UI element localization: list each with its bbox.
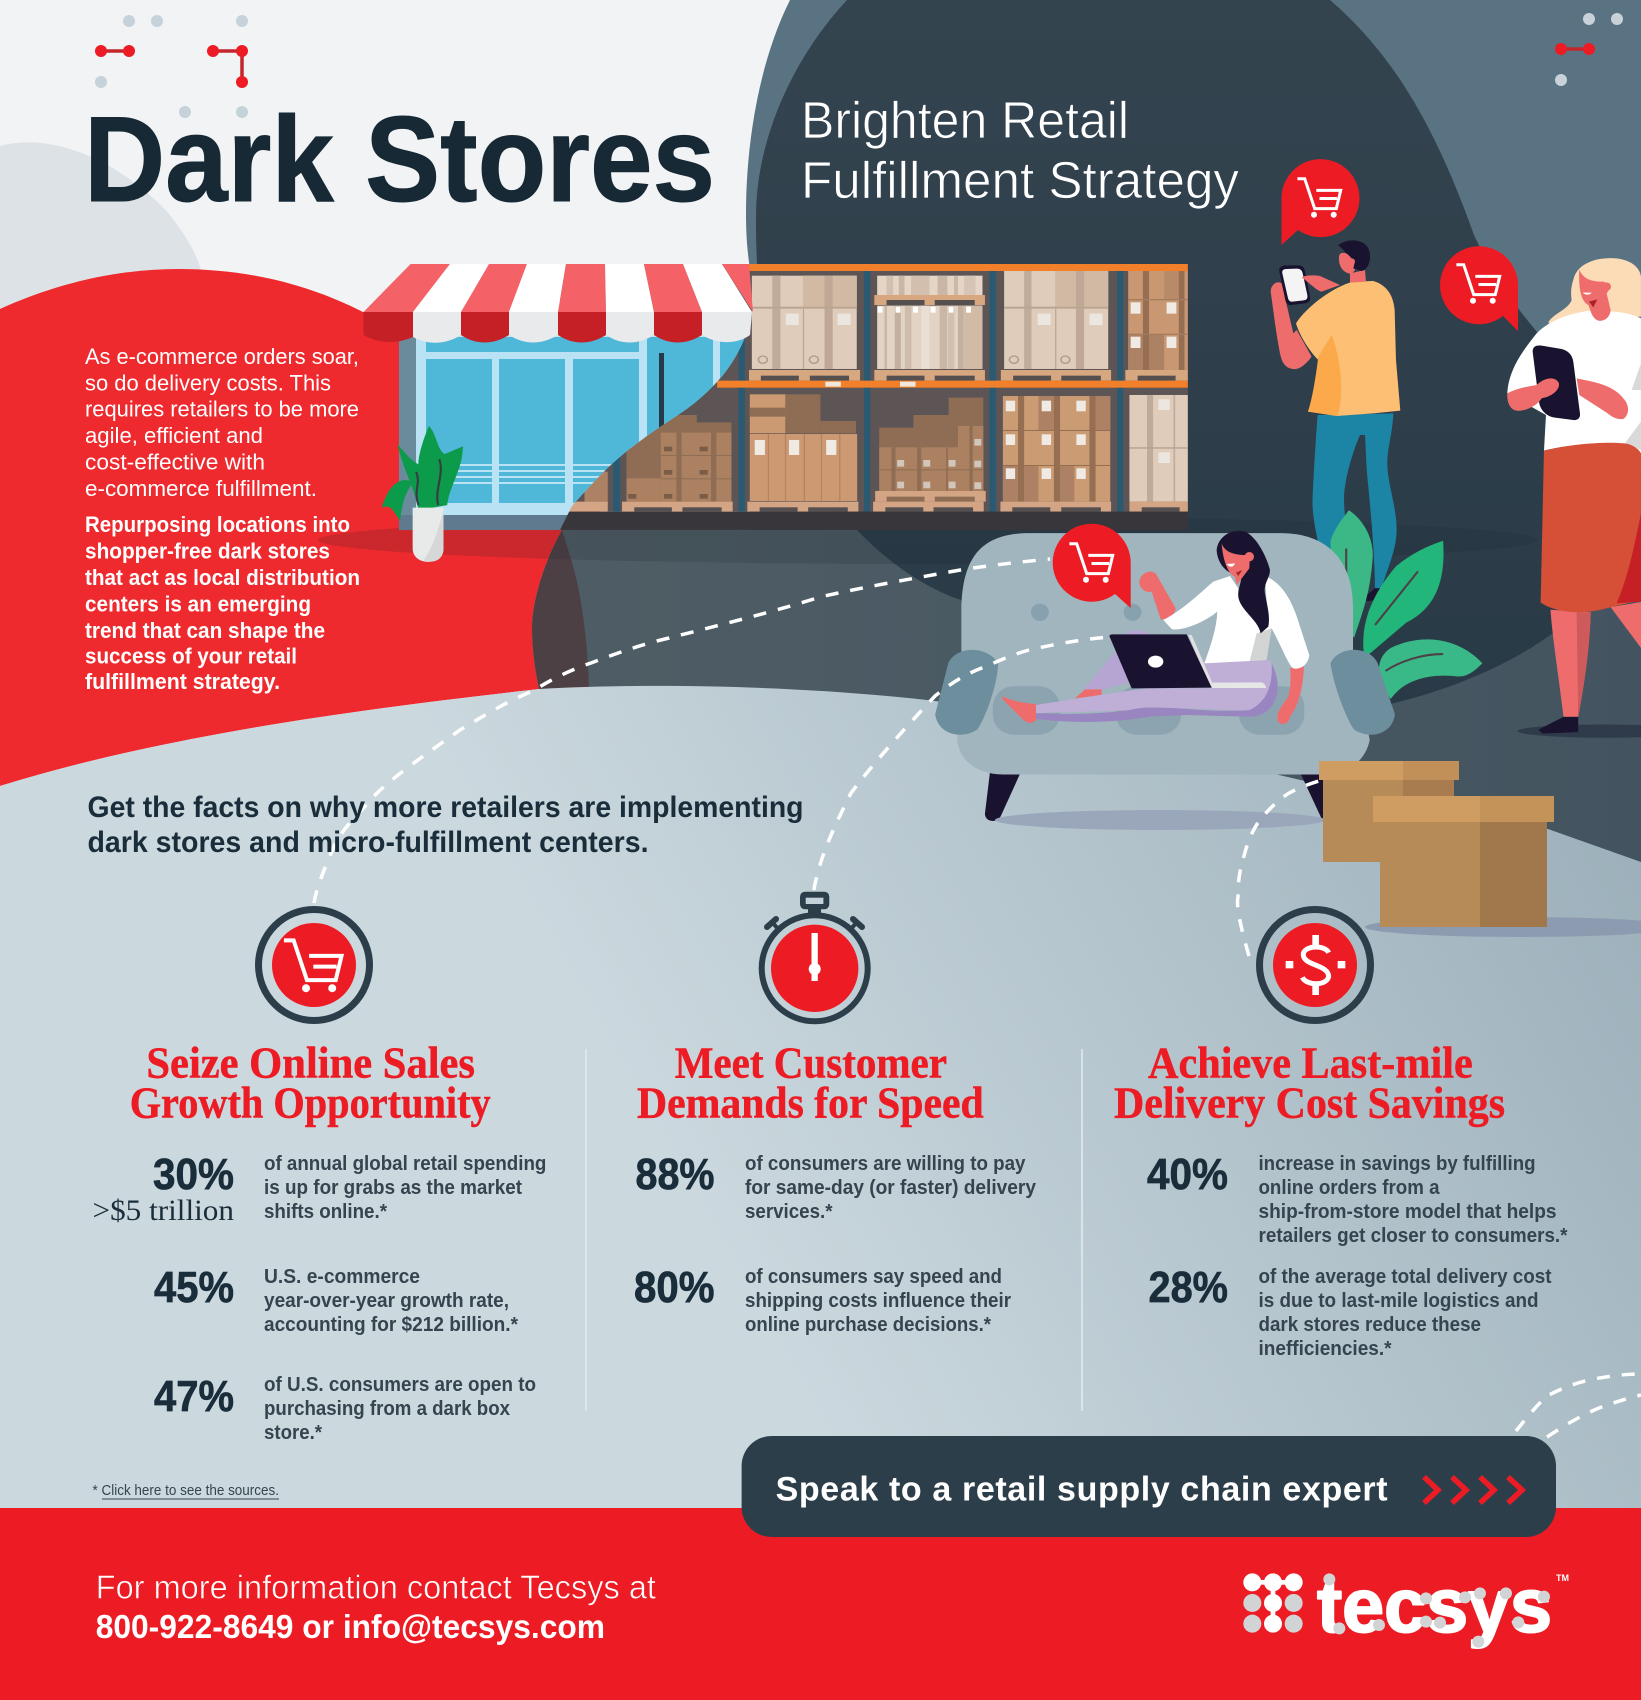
column 3 heading: Delivery Cost Savings bbox=[1114, 1078, 1505, 1128]
call to action button: Speak to a retail supply chain expert bbox=[776, 1471, 1388, 1509]
dashed routes bbox=[314, 559, 1641, 1437]
decorative dots top right bbox=[1555, 13, 1623, 86]
footer band bbox=[0, 1508, 1641, 1700]
column 2 heading bbox=[637, 1038, 984, 1128]
background: red blob bbox=[0, 269, 600, 786]
lower bay C bbox=[1000, 396, 1111, 512]
upper bay A bbox=[749, 276, 860, 381]
stat: 45%: 45% bbox=[154, 1263, 234, 1312]
cart bubble: sofa bbox=[1053, 524, 1131, 608]
decorative dots top left bbox=[95, 15, 248, 118]
background: dark blob bbox=[756, 0, 1641, 720]
stat: 40%: 40% bbox=[1147, 1150, 1228, 1199]
awning bbox=[364, 264, 753, 343]
floor shadow under shelves bbox=[318, 516, 1538, 564]
column 1 heading: Growth Opportunity bbox=[130, 1078, 491, 1128]
stat: 45%: year-over-year growth rate, bbox=[264, 1290, 509, 1312]
stat: 40% bbox=[1147, 1150, 1568, 1247]
stat: 45%: U.S. e-commerce bbox=[264, 1266, 420, 1288]
man with phone bbox=[1271, 240, 1400, 601]
intro text: e-commerce fulfillment. bbox=[85, 476, 317, 501]
stat: 80%: of consumers say speed and bbox=[745, 1266, 1002, 1288]
stat: 40%: online orders from a bbox=[1258, 1177, 1440, 1199]
stat: 40%: ship-from-store model that helps bbox=[1258, 1201, 1556, 1223]
background: steel blob top right bbox=[746, 0, 1641, 560]
stat: 28%: is due to last-mile logistics and bbox=[1258, 1290, 1538, 1312]
contact text: 800-922-8649 or info@tecsys.com bbox=[96, 1608, 605, 1645]
intro text: agile, efficient and bbox=[85, 423, 263, 448]
subtitle: Fulfillment Strategy bbox=[801, 152, 1239, 210]
tecsys logo: TM bbox=[1556, 1573, 1569, 1583]
stat: 28% bbox=[1148, 1263, 1552, 1360]
stat: 40%: retailers get closer to consumers.* bbox=[1258, 1225, 1568, 1247]
background: grey hill bbox=[0, 142, 201, 320]
subtitle: Brighten Retail bbox=[801, 92, 1129, 150]
stat: 28%: dark stores reduce these bbox=[1258, 1314, 1481, 1336]
intro text: As e-commerce orders soar, bbox=[85, 344, 359, 369]
facts heading bbox=[88, 791, 804, 859]
intro bold text: Repurposing locations into bbox=[85, 512, 350, 537]
stat: 28%: inefficiencies.* bbox=[1258, 1338, 1392, 1360]
stat: 30%: of annual global retail spending bbox=[264, 1153, 546, 1175]
cardboard boxes bbox=[1319, 761, 1641, 937]
lower bay A bbox=[747, 394, 858, 512]
column 1 heading: Seize Online Sales bbox=[146, 1038, 475, 1088]
intro bold text: fulfillment strategy. bbox=[85, 669, 280, 694]
stat: 30%: shifts online.* bbox=[264, 1201, 387, 1223]
stat: 88% bbox=[636, 1150, 1037, 1223]
column 2 heading: Demands for Speed bbox=[637, 1078, 984, 1128]
intro text: so do delivery costs. This bbox=[85, 370, 331, 396]
stat: 30%: is up for grabs as the market bbox=[264, 1177, 522, 1199]
stat: 47%: purchasing from a dark box bbox=[264, 1398, 510, 1420]
column 3 heading bbox=[1114, 1038, 1505, 1128]
intro bold text: shopper-free dark stores bbox=[85, 538, 330, 564]
stat: 47%: 47% bbox=[154, 1372, 234, 1421]
stat: 80%: online purchase decisions.* bbox=[745, 1314, 991, 1336]
cart bubble: man bbox=[1282, 159, 1359, 245]
icon: shopping cart bbox=[258, 910, 370, 1020]
stat: 47% bbox=[154, 1372, 536, 1444]
stat: 30%: 30% bbox=[153, 1150, 234, 1199]
stat: 88%: of consumers are willing to pay bbox=[745, 1153, 1026, 1175]
woman standing with tablet bbox=[1507, 258, 1641, 738]
column 1 heading bbox=[130, 1038, 491, 1128]
icon: stopwatch bbox=[762, 892, 868, 1021]
contact text bbox=[96, 1569, 656, 1645]
title: Dark Stores bbox=[84, 91, 715, 227]
woman on sofa with laptop bbox=[1002, 531, 1309, 724]
icon: dollar bbox=[1260, 910, 1370, 1020]
intro text: requires retailers to be more bbox=[85, 396, 359, 422]
upper bay D bbox=[1125, 271, 1188, 381]
upper bay B bbox=[874, 276, 985, 381]
column 2 heading: Meet Customer bbox=[675, 1038, 947, 1088]
storefront bbox=[399, 335, 744, 530]
potted plant bbox=[382, 426, 463, 562]
stat: 80%: 80% bbox=[634, 1263, 714, 1312]
upper bay C bbox=[1001, 271, 1111, 381]
icon: chevrons bbox=[1424, 1477, 1522, 1503]
stat: 80% bbox=[634, 1263, 1011, 1336]
lower bay D bbox=[1129, 395, 1188, 512]
stat: 47%: store.* bbox=[264, 1422, 322, 1444]
sofa shadow bbox=[995, 810, 1325, 830]
orange shelf beams bbox=[717, 264, 1188, 388]
sofa bbox=[935, 533, 1395, 827]
stat: 40%: increase in savings by fulfilling bbox=[1258, 1153, 1536, 1175]
lower bay left bbox=[568, 415, 733, 512]
call to action button bbox=[742, 1436, 1556, 1537]
intro bold text: trend that can shape the bbox=[85, 618, 325, 643]
intro bold text: centers is an emerging bbox=[85, 592, 311, 616]
background: maroon overlap bbox=[532, 530, 589, 689]
footnote: * Click here to see the sources. bbox=[92, 1483, 279, 1499]
lower bay B bbox=[873, 398, 986, 512]
intro text: cost-effective with bbox=[85, 450, 265, 474]
background: slate floor bbox=[532, 530, 1641, 900]
stat: 88%: services.* bbox=[745, 1201, 833, 1223]
stat: 28%: 28% bbox=[1148, 1263, 1228, 1312]
intro bold text bbox=[85, 512, 360, 694]
facts heading: Get the facts on why more retailers are implementing bbox=[88, 791, 804, 824]
stat: 45%: accounting for $212 billion.* bbox=[264, 1314, 518, 1336]
intro text bbox=[85, 344, 359, 501]
tecsys logo: tecsys bbox=[1317, 1564, 1552, 1649]
stat: 30%: >$5 trillion bbox=[92, 1194, 234, 1227]
warehouse shelves bbox=[560, 264, 1188, 530]
stat: 88%: 88% bbox=[636, 1150, 714, 1199]
stat: 88%: for same-day (or faster) delivery bbox=[745, 1177, 1037, 1199]
cart bubble: standing woman bbox=[1440, 246, 1518, 331]
intro bold text: success of your retail bbox=[85, 644, 297, 668]
intro bold text: that act as local distribution bbox=[85, 565, 360, 590]
stat: 28%: of the average total delivery cost bbox=[1258, 1266, 1552, 1288]
background: light lower panel bbox=[0, 686, 1641, 1510]
shelf floor bbox=[560, 512, 1188, 530]
subtitle bbox=[801, 92, 1239, 210]
stat: 45% bbox=[154, 1263, 518, 1336]
stat: 47%: of U.S. consumers are open to bbox=[264, 1374, 536, 1396]
facts heading: dark stores and micro-fulfillment centers. bbox=[88, 826, 648, 859]
green plant behind sofa bbox=[1331, 510, 1482, 699]
stat: 30% bbox=[92, 1150, 546, 1227]
column 3 heading: Achieve Last-mile bbox=[1148, 1038, 1473, 1088]
stat: 80%: shipping costs influence their bbox=[745, 1290, 1011, 1312]
contact text: For more information contact Tecsys at bbox=[96, 1569, 656, 1606]
